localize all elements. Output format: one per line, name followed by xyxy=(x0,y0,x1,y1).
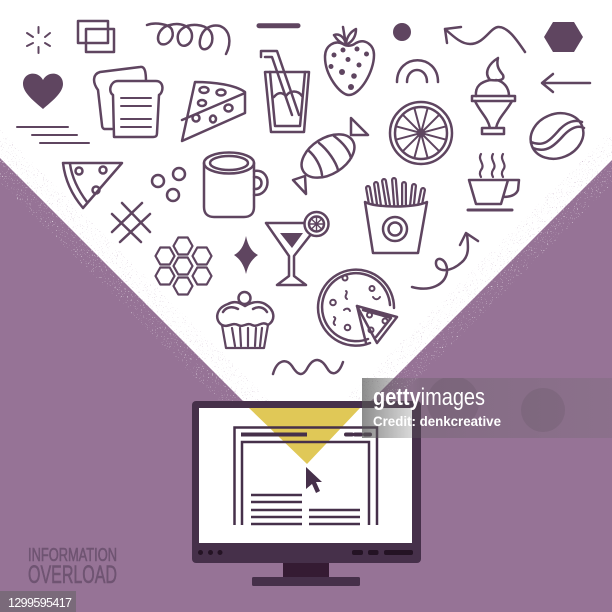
monitor xyxy=(192,401,421,586)
icon: coffee bean xyxy=(524,105,590,167)
yellow light cone xyxy=(249,408,360,464)
icon: left arrow xyxy=(542,74,590,92)
icon: heart xyxy=(23,74,63,109)
icon: squiggle arrow top right xyxy=(445,27,525,52)
watermark text: gettyimages xyxy=(373,384,485,411)
icon set xyxy=(17,21,590,374)
icon: hexagon xyxy=(544,22,583,52)
monitor buttons xyxy=(198,550,413,555)
icon: pizza slice small xyxy=(63,163,122,208)
icon: dot xyxy=(393,23,411,41)
image id tag: 1299595417 xyxy=(8,596,72,610)
icon: sparkle xyxy=(27,27,50,53)
icon: three circles xyxy=(152,168,185,201)
icon: candy xyxy=(293,118,368,194)
icon: strawberry xyxy=(325,27,374,95)
monitor stand xyxy=(283,563,329,577)
watermark text: Credit: denkcreative xyxy=(373,414,501,429)
monitor base xyxy=(252,577,360,586)
background: purple side panels xyxy=(0,158,612,612)
title: information overload xyxy=(28,545,117,589)
cursor arrow xyxy=(306,467,322,493)
watermark band xyxy=(362,376,612,438)
icon: mug xyxy=(204,152,268,217)
icon: three lines xyxy=(17,127,89,143)
icon: coffee cup with steam xyxy=(468,154,519,210)
icon: orange slice xyxy=(390,102,452,164)
icon: honeycomb xyxy=(156,238,212,294)
icon: overlapping rectangles xyxy=(78,21,114,52)
icon: diamond star xyxy=(234,236,258,274)
icon: wave line xyxy=(273,360,343,374)
icon: rainbow arcs xyxy=(397,60,438,82)
icon: cheese xyxy=(182,82,245,141)
icon: hash grid xyxy=(112,203,150,242)
title: information overload: INFORMATION xyxy=(28,545,117,565)
icon: whole pizza xyxy=(318,270,397,346)
icon: bar xyxy=(259,23,298,28)
icon: drink glass with straw xyxy=(261,51,309,132)
monitor frame xyxy=(192,401,421,563)
icon: toast xyxy=(94,67,162,137)
browser window xyxy=(234,428,377,525)
icon: fries box xyxy=(365,180,427,253)
title: information overload: OVERLOAD xyxy=(28,561,117,589)
monitor screen xyxy=(199,408,412,543)
icon: spiral line xyxy=(147,24,229,54)
icon: martini xyxy=(266,212,328,285)
icon: ice cream sundae xyxy=(472,58,515,134)
image id tag xyxy=(0,591,76,612)
icon: curly arrow xyxy=(412,233,478,289)
watermark text xyxy=(373,384,501,429)
icon: cupcake xyxy=(217,292,273,348)
